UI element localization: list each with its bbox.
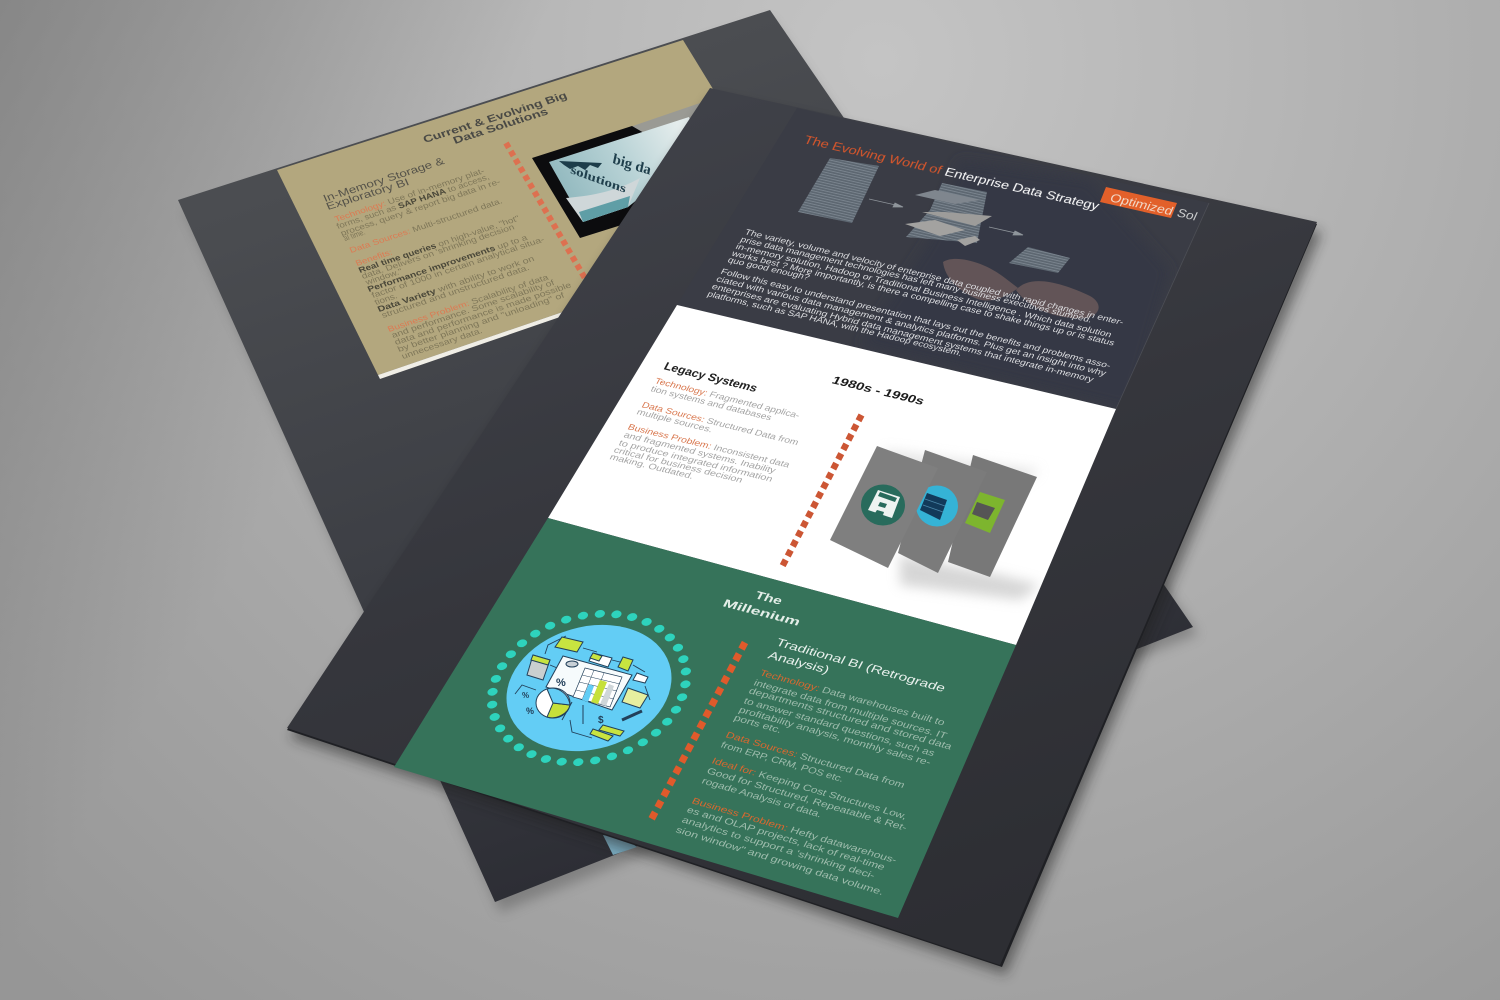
panel: Legacy Systems 1980s-1990s: [548, 305, 1116, 645]
millenium body text: sion window" and growing data volume.: [674, 825, 886, 898]
back sheet body text: Performance improvements up to a: [366, 233, 529, 294]
legacy body text: Technology: Fragmented applica-: [653, 376, 802, 420]
legacy body text: to produce integrated information: [617, 438, 775, 483]
legacy body text: Business Problem: Inconsistent data: [626, 422, 792, 469]
ring of teal dots: [459, 595, 719, 781]
arrow: stack to fragments: [869, 199, 903, 207]
illustration: BI analysis badge: [459, 595, 719, 781]
millenium body text: analytics to support a 'shrinking deci-: [680, 815, 877, 881]
arrow: fragments to small stack: [989, 227, 1023, 235]
fold line right: [1116, 203, 1209, 409]
back sheet body text: Exploratory BI: [324, 177, 411, 213]
millenium body text: departments structured and stored data: [747, 686, 954, 752]
small icons: laptop, calculator, card, tablet, envelope, note, pen, money: [527, 637, 648, 741]
back sheet body text: forms, such as SAP HANA to access,: [335, 172, 491, 231]
percent and dollar signs: [522, 677, 604, 726]
card: filing cabinet: [830, 446, 938, 568]
back sheet body text: structured and unstructured data.: [380, 263, 531, 320]
heading: Traditional BI: Analysis): [766, 649, 832, 676]
intro text block: in-memory solution, Hadoop or Traditional Business Intelligence . Which data solution: [734, 242, 1114, 339]
heading: Legacy Systems: Legacy Systems: [662, 360, 760, 395]
panel: The Millenium: [394, 518, 1016, 918]
intro text block: quo good enough?: [726, 255, 812, 282]
intro text block: works best ? More importantly, is there a compelling case to shake things up or is status: [729, 248, 1117, 348]
percent and dollar signs: $: [598, 715, 604, 726]
back sheet body text: data and performance is made possible: [393, 280, 573, 347]
legacy body text: critical for business decision: [612, 445, 745, 484]
intro text block: platforms, such as SAP HANA, with the Hadoop ecosystem.: [706, 289, 964, 358]
legacy body text: and fragmented systems. Inability: [622, 430, 778, 475]
connector lines: [515, 636, 650, 738]
legacy body text: multiple sources.: [635, 407, 715, 434]
back sheet: Current & Evolving Big Data Solutions: [178, 10, 1198, 912]
logo: Optimized Sol: Optimized: [1108, 191, 1175, 218]
millenium body text: ports etc.: [732, 713, 784, 736]
logo: Optimized Sol: [1100, 187, 1199, 223]
back sheet tablet photo: solutions: [569, 162, 627, 196]
dotted divider: [650, 642, 745, 821]
millenium body text: Data Sources: Structured Data from: [724, 730, 907, 791]
millenium body text: rogade Analysis of data.: [700, 776, 824, 820]
millenium body text: [674, 668, 954, 898]
card: chip: [948, 455, 1037, 577]
intro text block: enterprises are evaluating Hybrid data management systems that integrate in-memory: [710, 282, 1096, 384]
back sheet body text: tions.: [373, 291, 399, 307]
back sheet tablet photo: [532, 103, 760, 238]
back sheet body text: Benefits:: [354, 247, 394, 268]
millenium body text: Technology: Data warehouses built to: [758, 668, 947, 728]
back sheet body text: data. Delivers on 'shrinking decision: [360, 222, 516, 281]
back sheet tan panel: [277, 40, 800, 375]
card: server: [898, 450, 987, 573]
millenium body text: Ideal for: Keeping Cost Structures Low,: [710, 756, 909, 822]
back sheet body text: and performance. Some scalability of: [390, 277, 557, 340]
chart board: [546, 656, 632, 724]
heading: Traditional BI: Traditional BI (Retrograde: [774, 636, 948, 695]
heading: The Millenium: [721, 589, 803, 628]
icon: data stack small: [1009, 247, 1070, 273]
back sheet body text: Data Sources: Multi-structured data.: [348, 196, 504, 255]
heading: The Millenium: The: [753, 589, 785, 607]
back sheet body text: Data Variety with ability to work on: [376, 254, 536, 314]
intro text block: prise data management technologies has left many business executives stumped.: [739, 235, 1094, 324]
back sheet body text: process, query & report big data in re-: [339, 177, 502, 238]
back sheet body text: Business Problem: Scalability of data: [386, 272, 550, 334]
header panel with photo: [706, 135, 1198, 408]
title: The Evolving World of Enterprise Data Strategy: [802, 133, 1102, 213]
percent and dollar signs: %: [556, 677, 566, 689]
percent and dollar signs: %: [522, 691, 529, 700]
back sheet body text: unnecessary data.: [400, 326, 484, 361]
back sheet blue corner fragment: [603, 835, 637, 855]
percent and dollar signs: %: [526, 706, 534, 716]
dotted divider: [782, 415, 862, 566]
icon: data stack fragmented: [905, 183, 992, 246]
legacy body text: Data Sources: Structured Data from: [640, 400, 801, 447]
millenium body text: to answer standard questions, such as: [742, 696, 937, 759]
back sheet tablet photo: big da: [611, 152, 653, 179]
millenium body text: es and OLAP projects, lack of real-time: [685, 805, 887, 873]
legacy body text: tion systems and databases: [649, 384, 774, 422]
front sheet: Enterprise Data Strategy: [287, 88, 1322, 975]
back sheet body text: Real time queries on high-value, "hot": [357, 213, 521, 275]
back sheet body text: by better planning and "unloading" of: [396, 290, 567, 354]
icon: hands: [943, 259, 1099, 318]
millenium body text: integrate data from multiple sources. IT: [752, 678, 949, 741]
illustration: three grey cards: [830, 446, 1040, 600]
back sheet body text: al time.: [342, 227, 367, 243]
back sheet body text: In-Memory Storage &: [321, 156, 446, 205]
intro text block: [706, 227, 1126, 384]
millenium body text: profitability analysis, monthly sales re-: [737, 705, 933, 768]
millenium body text: from ERP, CRM, POS etc.: [719, 740, 846, 785]
millenium body text: Good for Structured, Repeatable & Ret-: [705, 766, 909, 833]
legacy body text: [608, 376, 802, 484]
intro text block: The variety, volume and velocity of enterprise data coupled with rapid changes in enter-: [743, 227, 1126, 327]
back sheet body text: [321, 156, 573, 361]
heading: 1980s - 1990s: 1980s - 1990s: [830, 374, 927, 408]
intro text block: ciated with various data management & analytics platforms. Plus get an insight into why: [715, 274, 1109, 378]
back sheet heading: Data Solutions: [451, 106, 550, 147]
back sheet body text: Technology: Use of in-memory plat-: [333, 166, 486, 224]
back sheet dotted divider: [506, 143, 586, 280]
icon: data stack large: [798, 158, 879, 223]
millenium body text: Business Problem: Hefty datawarehous-: [690, 796, 899, 866]
heading: Traditional BI: [766, 636, 948, 695]
back sheet body text: window.": [363, 266, 404, 287]
legacy body text: making. Outdated.: [608, 452, 696, 481]
logo: Optimized Sol: Sol: [1175, 206, 1199, 223]
back sheet body text: factor of 1000 in certain analytical situa-: [370, 234, 546, 300]
intro text block: Follow this easy to understand presentation that lays out the benefits and problems asso-: [719, 267, 1113, 370]
pie chart: [536, 688, 570, 718]
back sheet heading: Current & Evolving Big: [421, 90, 569, 146]
heading: The Millenium: Millenium: [721, 597, 803, 628]
